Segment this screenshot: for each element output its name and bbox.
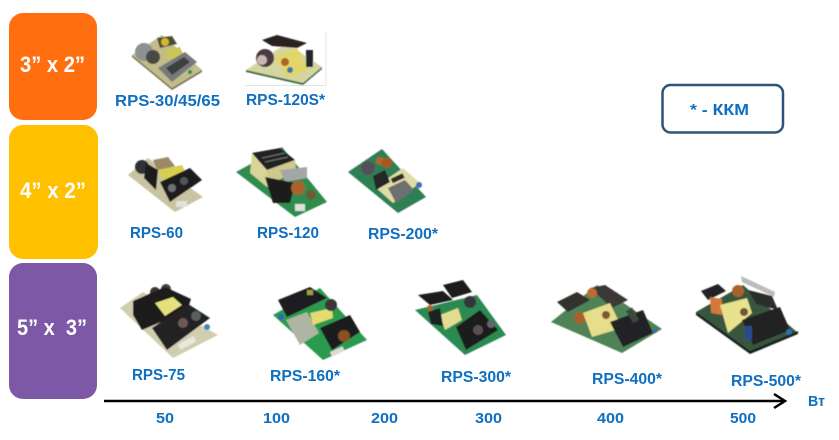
product: RPS-75: [120, 284, 218, 358]
product: RPS-500: [696, 276, 798, 354]
axis tick labels: 50: [156, 410, 174, 427]
callout: ККМ legend: * - ККМ: [690, 102, 749, 119]
label: RPS-400*: RPS-400*: [592, 371, 663, 388]
product: RPS-400: [551, 285, 662, 353]
label: RPS-300*: RPS-300*: [441, 369, 512, 386]
product: RPS-160: [273, 287, 367, 360]
product: RPS-120S: [245, 31, 326, 86]
axis tick labels: 100: [263, 410, 290, 427]
arrow: power axis: [104, 394, 785, 408]
panel: 3 x 2 size: [9, 13, 97, 120]
label: RPS-30/45/65: RPS-30/45/65: [115, 93, 220, 110]
panel: 4 x 2 size: 4” x 2”: [20, 178, 86, 203]
callout: ККМ legend: [662, 85, 783, 132]
panel: 3 x 2 size: 3” x 2”: [20, 52, 85, 77]
label: RPS-160*: RPS-160*: [270, 368, 341, 385]
label: RPS-200*: RPS-200*: [368, 226, 439, 243]
axis tick labels: 500: [730, 410, 756, 427]
axis tick labels: 300: [475, 410, 502, 427]
product: RPS-30/45/65: [132, 35, 202, 90]
label: RPS-120: RPS-120: [257, 225, 319, 242]
panel: 5 x 3 size: 5” x 3”: [17, 315, 87, 340]
axis unit: Вт: [808, 393, 825, 410]
axis tick labels: 400: [597, 410, 624, 427]
panel: 5 x 3 size: [9, 263, 97, 399]
label: RPS-120S*: RPS-120S*: [246, 92, 326, 109]
product: RPS-120: [236, 147, 327, 217]
panel: 4 x 2 size: [9, 125, 98, 259]
label: RPS-60: RPS-60: [130, 225, 183, 242]
product: RPS-200: [348, 149, 426, 213]
axis tick labels: [156, 410, 756, 427]
product: RPS-60: [128, 157, 203, 212]
label: RPS-500*: RPS-500*: [731, 373, 802, 390]
axis tick labels: 200: [371, 410, 398, 427]
label: RPS-75: RPS-75: [132, 367, 185, 384]
product: RPS-300: [415, 280, 506, 355]
